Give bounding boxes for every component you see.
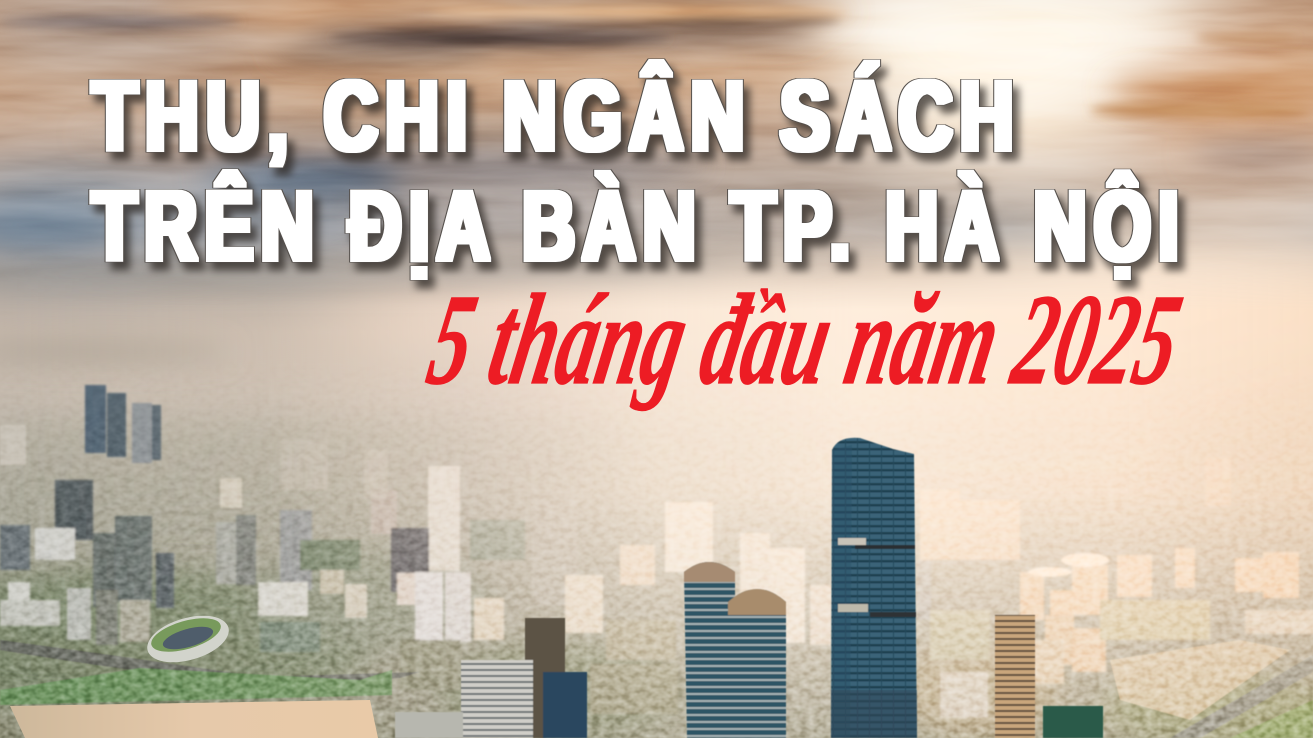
twin towers <box>684 562 786 738</box>
road and green strips <box>0 640 1313 738</box>
title <box>92 60 1186 281</box>
city texture <box>0 413 1313 738</box>
title line 1: THU, CHI NGÂN SÁCH <box>92 60 1021 171</box>
foreground towers <box>395 615 1103 738</box>
city far haze and buildings <box>0 385 1313 738</box>
main landmark tower <box>831 438 917 738</box>
distant towers right <box>665 458 1313 718</box>
oval green-roof building <box>142 607 234 671</box>
sky clouds <box>0 0 1313 360</box>
riverside pale lake <box>10 700 378 738</box>
distant towers left <box>0 385 678 714</box>
haze overlay <box>0 240 1313 738</box>
